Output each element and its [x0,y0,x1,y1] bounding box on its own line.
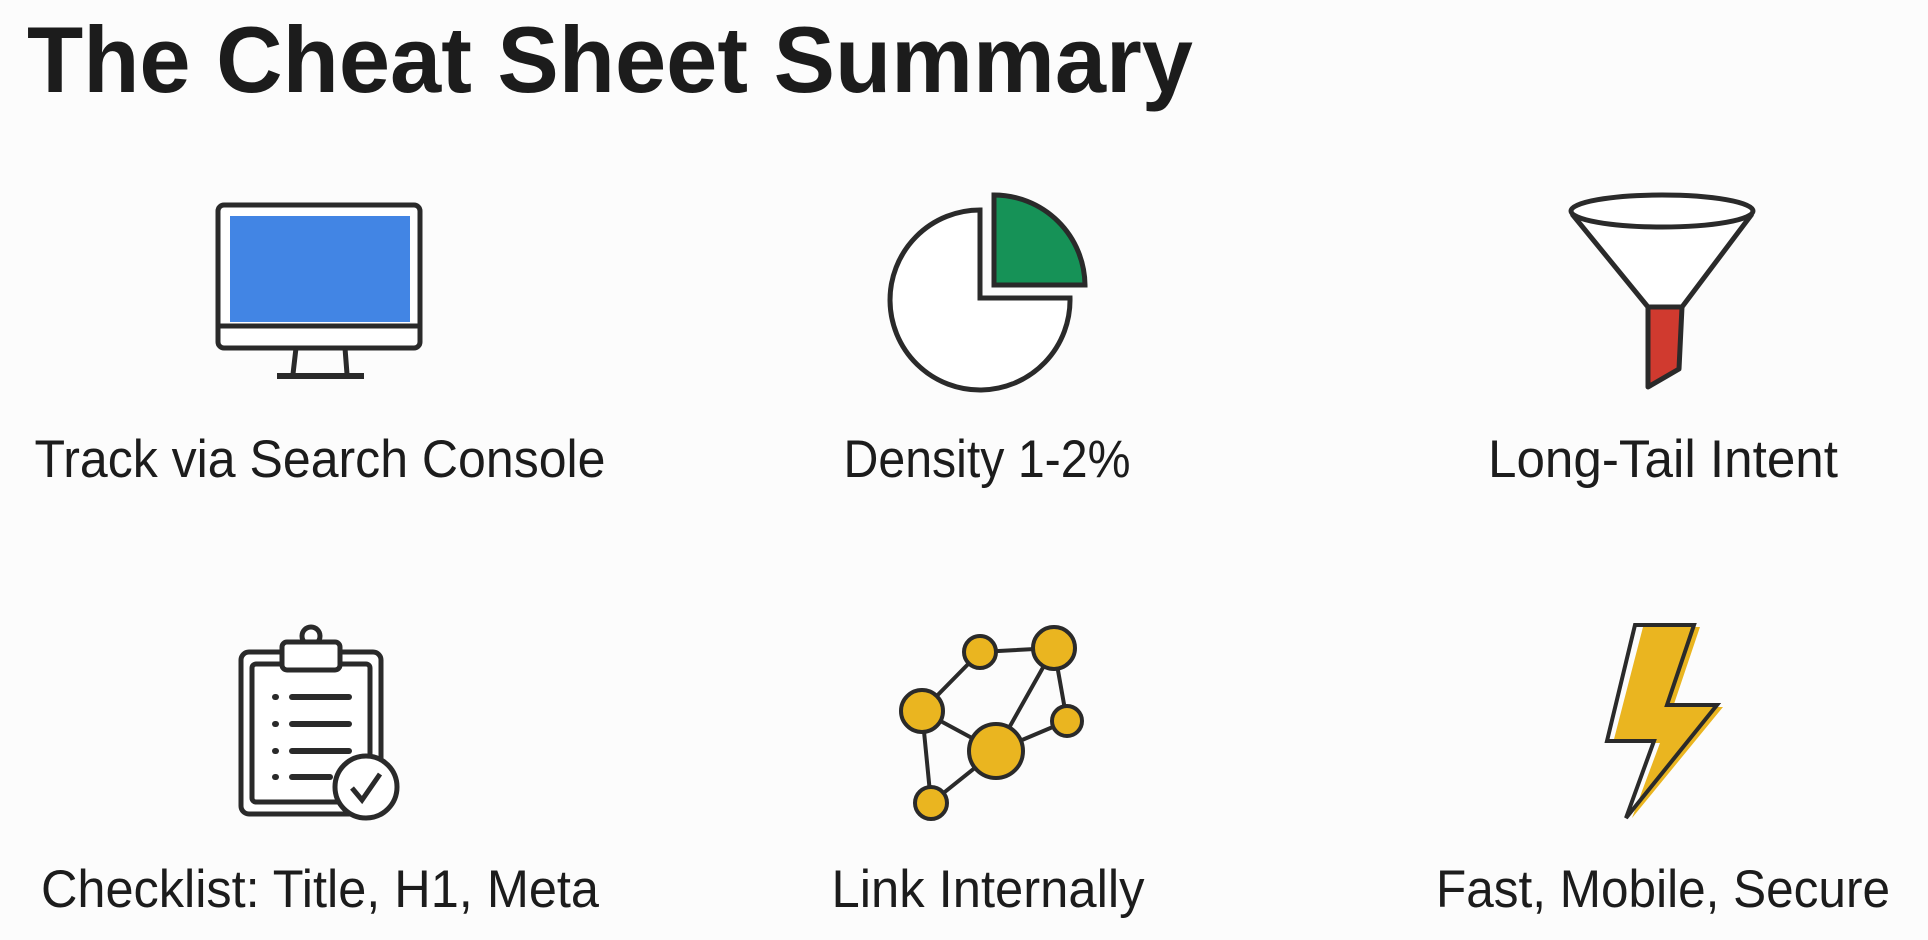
icon: monitor [218,205,420,376]
icon: network [901,627,1082,819]
icon: lightning [1607,625,1723,818]
label: track: Track via Search Console [34,430,606,489]
label: checklist: Checklist: Title, H1, Meta [41,860,599,919]
label: link internally: Link Internally [832,860,1145,919]
label: fast: Fast, Mobile, Secure [1436,860,1890,919]
label: density: Density 1-2% [844,430,1130,489]
icon: clipboard [241,627,397,818]
label: long-tail: Long-Tail Intent [1488,430,1838,489]
icon: funnel [1571,195,1753,387]
icon: pie chart [890,195,1085,390]
title: The Cheat Sheet Summary [27,7,1193,112]
